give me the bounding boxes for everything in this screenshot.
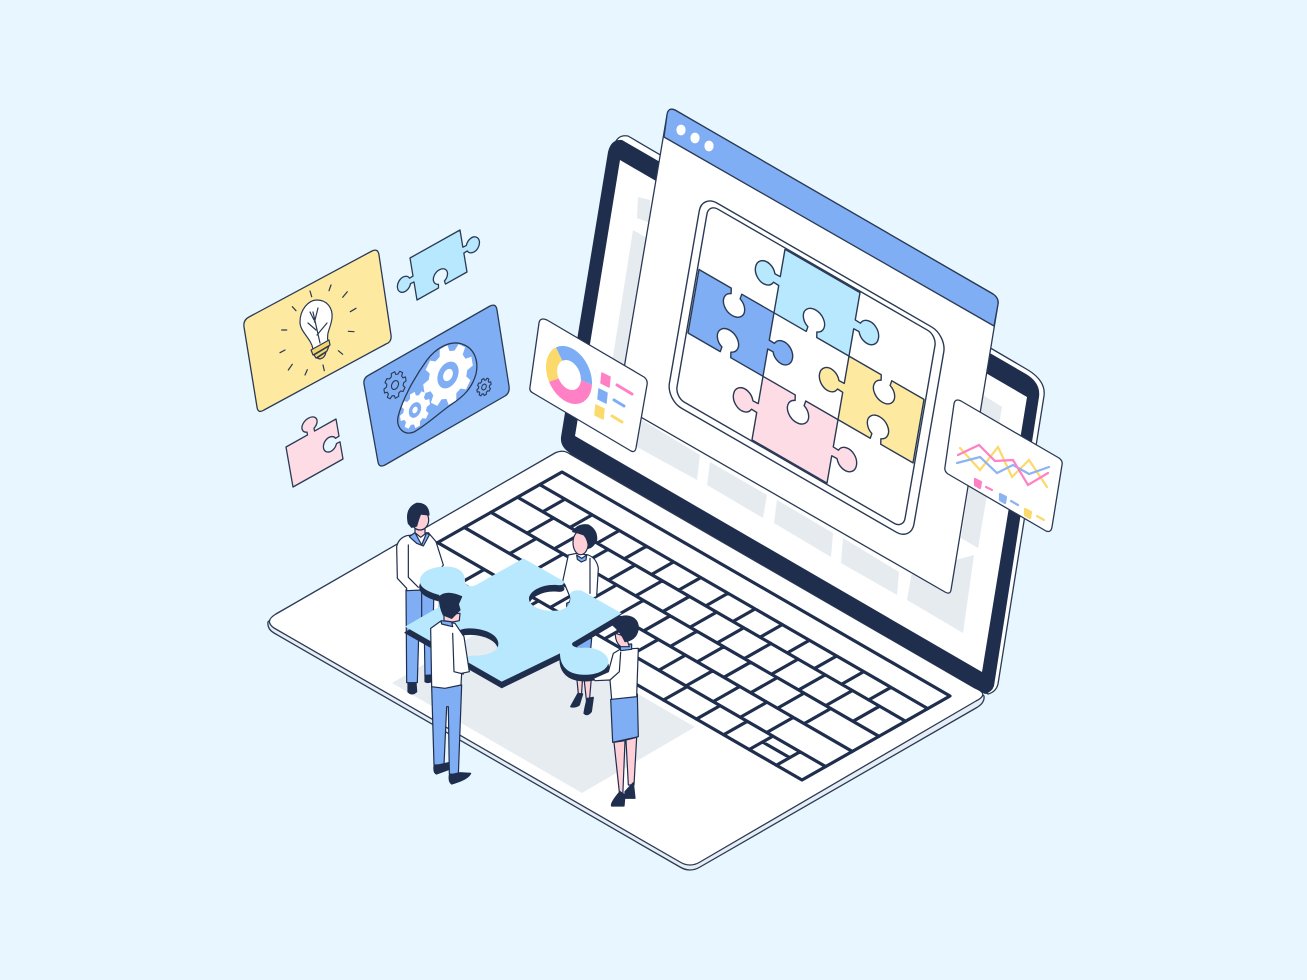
person: man back left <box>397 503 443 694</box>
pink puzzle piece <box>728 362 862 497</box>
puzzle frame inner <box>675 204 937 529</box>
gears capsule <box>398 334 477 435</box>
browser window <box>618 109 998 593</box>
line chart card body <box>945 400 1062 532</box>
yellow puzzle piece <box>814 342 924 463</box>
keyboard <box>414 472 950 780</box>
light bulb <box>300 300 332 359</box>
idea card body <box>244 250 391 411</box>
person: woman front <box>593 616 638 806</box>
line chart card <box>945 400 1062 532</box>
donut legend <box>595 373 632 422</box>
screen placeholder blocks <box>603 197 1002 633</box>
window header bar <box>664 109 998 326</box>
donut chart <box>542 336 596 414</box>
puzzle piece thickness <box>405 564 622 688</box>
puzzle board <box>667 194 947 541</box>
floating light blue puzzle piece <box>394 221 483 309</box>
donut card body <box>530 319 647 452</box>
screen display area <box>575 160 1027 672</box>
keyboard outline <box>414 472 950 780</box>
large puzzle piece being carried <box>405 558 622 688</box>
laptop base <box>268 451 984 870</box>
line chart legend <box>975 479 1044 520</box>
light blue puzzle piece <box>750 235 884 370</box>
window control dots <box>676 125 714 151</box>
base lip <box>268 454 984 870</box>
illustration canvas <box>243 108 1063 871</box>
person: woman back right <box>563 525 598 715</box>
base top surface <box>269 451 983 865</box>
idea card with light bulb <box>244 250 391 411</box>
window body <box>618 109 998 593</box>
blue puzzle piece <box>688 270 798 390</box>
team carrying the puzzle piece <box>397 503 638 806</box>
gears card body <box>364 305 509 466</box>
group shadow on laptop <box>392 617 695 793</box>
small outlined gears <box>382 367 492 403</box>
light rays <box>280 285 356 375</box>
floating pink puzzle piece <box>283 404 343 487</box>
gears card <box>364 305 509 466</box>
person: man front <box>431 593 471 784</box>
puzzle piece top face <box>405 558 622 682</box>
laptop screen <box>561 136 1044 694</box>
puzzle frame outer <box>667 194 947 541</box>
screen navy bezel <box>561 140 1039 694</box>
keyboard rows and keys <box>414 485 928 780</box>
donut chart card <box>530 319 647 452</box>
line chart series <box>957 445 1049 487</box>
screen outer edge <box>570 136 1044 694</box>
